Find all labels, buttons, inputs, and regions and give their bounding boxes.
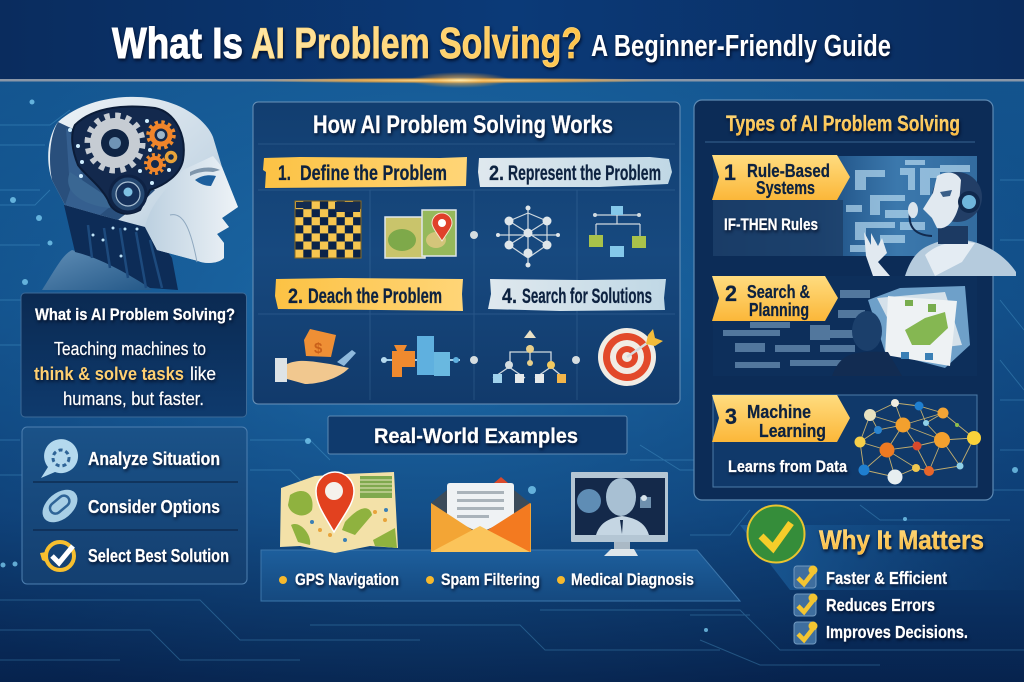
eye (195, 175, 216, 186)
type 3 card (712, 395, 981, 487)
step 1 banner (263, 157, 467, 188)
connector dot (572, 356, 580, 364)
icon: target with dart (598, 328, 663, 386)
header band (0, 0, 1024, 88)
panel: definition (21, 293, 246, 417)
step 4 banner: 4. (502, 285, 517, 308)
benefit 2: Reduces Errors (826, 595, 935, 615)
connector dot (470, 231, 478, 239)
face plate (145, 156, 238, 263)
analyze label: Analyze Situation (88, 449, 220, 469)
title: What Is (112, 19, 243, 68)
step 3 banner: 2. (288, 285, 303, 308)
panel: definition: humans, but faster. (63, 389, 204, 409)
step 4 banner: Search for Solutions (522, 285, 652, 308)
maze pattern (846, 160, 970, 252)
benefit 1 (794, 566, 947, 588)
title (112, 19, 891, 68)
banner: Systems (756, 178, 815, 198)
step 2 banner: Represent the Problem (508, 162, 661, 185)
step 4 banner (488, 279, 666, 311)
neck (64, 205, 178, 290)
panel: definition: Teaching machines to (54, 339, 206, 359)
skull back panel (50, 122, 155, 220)
icon: paperclip (36, 483, 84, 529)
icon: network graph (496, 206, 560, 268)
label: Learns from Data (728, 457, 847, 476)
orange gears (146, 122, 176, 173)
icon: hand with cube (275, 329, 356, 384)
heading: Types of AI Problem Solving (726, 111, 960, 136)
step 1 banner: 1. (278, 162, 291, 185)
step 2 banner: 2. (489, 162, 504, 185)
icon: map with pin (385, 210, 456, 258)
icon: checkerboard (295, 201, 361, 258)
robot figure (864, 172, 1016, 276)
illustration: robot head with gears (42, 97, 238, 290)
banner (712, 395, 850, 442)
banner: Rule-Based (747, 161, 830, 181)
heading: How AI Problem Solving Works (313, 111, 613, 139)
banner: 2 (725, 281, 737, 306)
icon: gold check badge (40, 542, 74, 570)
panel: definition: like (190, 364, 216, 384)
head shell (48, 97, 238, 263)
panel: how it works (253, 102, 680, 404)
banner: 1 (724, 160, 736, 185)
panel: definition: What is AI Problem Solving? (35, 305, 235, 324)
panel: types (694, 100, 1016, 500)
why it matters (740, 506, 1024, 644)
title: A Beginner-Friendly Guide (591, 28, 891, 63)
heading: Why It Matters (819, 525, 984, 555)
icon: decision tree (493, 330, 566, 383)
label: IF-THEN Rules (724, 215, 818, 234)
type 2 card (712, 276, 977, 376)
icon: GPS map (280, 472, 398, 553)
panel: definition: think & solve tasks (34, 364, 184, 384)
type 1 card (712, 155, 1016, 276)
neural network (854, 399, 981, 484)
maze pattern (723, 290, 870, 368)
step 1 banner: Define the Problem (300, 162, 447, 185)
platform with example labels (261, 550, 740, 601)
panel: steps list (22, 427, 247, 584)
icon: envelope (431, 477, 531, 552)
benefit 2 (794, 594, 935, 616)
icon: medical monitor (571, 472, 668, 556)
icon: green check badge (748, 506, 804, 562)
connector dot (470, 356, 478, 364)
platform with example labels: Medical Diagnosis (571, 570, 694, 589)
consider label: Consider Options (88, 497, 220, 517)
platform with example labels: Spam Filtering (441, 570, 540, 589)
banner (712, 155, 850, 200)
icon: analyze bubble (41, 439, 78, 478)
step 2 banner (478, 157, 672, 187)
brain cavity (72, 107, 184, 214)
platform with example labels: GPS Navigation (295, 570, 399, 589)
step 3 banner (275, 278, 463, 311)
benefit 3: Improves Decisions. (826, 622, 968, 642)
large gear (88, 116, 142, 170)
banner (712, 276, 838, 321)
real-world examples heading (328, 416, 627, 454)
maps and person (832, 286, 970, 376)
real-world examples heading: Real-World Examples (374, 425, 578, 448)
select label: Select Best Solution (88, 546, 229, 566)
step 3 banner: Deach the Problem (308, 285, 442, 308)
banner: Learning (759, 421, 826, 441)
banner: Planning (749, 300, 809, 320)
banner: Search & (747, 282, 810, 302)
lower dial (110, 176, 146, 212)
icon: puzzle blocks (381, 336, 460, 377)
title: AI Problem Solving? (251, 19, 582, 68)
shoulders (42, 250, 152, 290)
icon: org tree (589, 206, 646, 257)
icon: hand with cube: $ (314, 340, 323, 357)
benefit 3 (794, 622, 968, 644)
benefit 1: Faster & Efficient (826, 568, 947, 588)
banner: Machine (747, 402, 811, 422)
banner: 3 (725, 404, 737, 429)
